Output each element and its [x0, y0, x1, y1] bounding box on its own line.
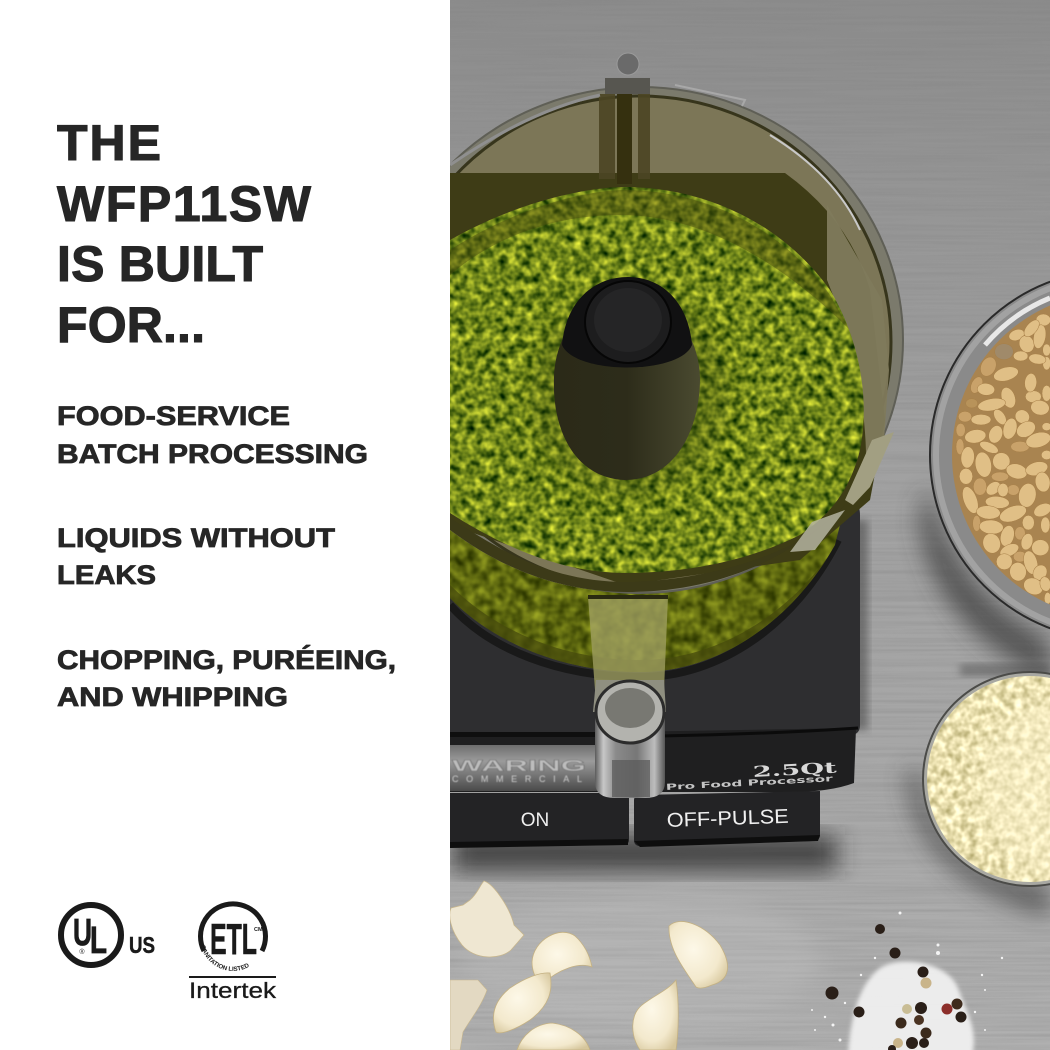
button: OFF-PULSE [634, 791, 820, 847]
use case: liquids without leaks: LIQUIDS WITHOUT [57, 523, 336, 553]
model label [666, 759, 837, 793]
button: ON [450, 793, 629, 848]
panel: white text column [0, 0, 450, 1050]
metal brand plate: COMMERCIAL [452, 774, 582, 784]
button: ON: ON [521, 810, 549, 831]
icon: ETL sanitation listed mark with Intertek: SANITATION LISTED [204, 945, 249, 971]
button: OFF-PULSE: OFF-PULSE [666, 806, 789, 832]
model label: 2.5Qt [752, 759, 837, 781]
shadows on counter [452, 490, 1050, 915]
bowl of grated parmesan [923, 672, 1050, 886]
icon: UL US certification mark: L [90, 920, 107, 962]
icon: ETL sanitation listed mark with Intertek [189, 901, 277, 1003]
icon: UL US certification mark: U [73, 912, 92, 954]
icon: ETL sanitation listed mark with Intertek: Intertek [189, 978, 277, 1003]
center stem and knob [554, 277, 700, 480]
title: WFP11SW [57, 176, 312, 232]
title: THE [57, 115, 161, 171]
model label: Pro Food Processor [666, 774, 834, 793]
use case: chopping, puréeing, whipping: AND WHIPPING [57, 682, 288, 712]
pine nuts [956, 314, 1050, 604]
garlic skin, lower left [450, 980, 487, 1050]
photo: food processor with pesto on steel counter [450, 0, 1050, 1050]
use case: food-service batch processing: FOOD-SERVICE [57, 401, 290, 431]
steel countertop [450, 0, 1050, 1050]
icon: UL US certification mark: ® [79, 948, 85, 956]
use case: food-service batch processing: BATCH PROCESSING [57, 439, 368, 469]
bowl of pine nuts [930, 270, 1050, 640]
title: FOR... [57, 297, 205, 353]
lid edge highlights [450, 85, 894, 552]
icon: UL US certification mark: US [129, 932, 155, 958]
metal brand plate: WARING [452, 758, 586, 775]
garlic skin, upper left [450, 881, 524, 957]
icon: ETL sanitation listed mark with Intertek: ETL [210, 915, 257, 964]
use case: liquids without leaks: LEAKS [57, 560, 156, 590]
bowl lower wall with pesto [450, 526, 840, 672]
garlic clove, large [669, 921, 728, 988]
metal brand plate [450, 745, 598, 791]
pesto surface [450, 180, 880, 580]
salt pile with scattered grains [811, 912, 1003, 1050]
garlic clove, tilted [494, 973, 551, 1033]
garlic clove, bottom cut off [517, 1023, 590, 1050]
lid feed tab [599, 53, 650, 184]
title [57, 115, 312, 353]
bowl and lid [377, 87, 903, 593]
garlic clove, bottom [633, 980, 678, 1050]
use case: food-service batch processing [57, 401, 368, 469]
pour handle [588, 597, 668, 798]
peppercorns [826, 924, 966, 1050]
use case: liquids without leaks [57, 523, 336, 590]
icon: ETL sanitation listed mark with Intertek: CM [254, 927, 263, 933]
garlic clove [532, 932, 592, 985]
use case: chopping, puréeing, whipping [57, 644, 396, 712]
use case: chopping, puréeing, whipping: CHOPPING, PURÉEING, [57, 644, 396, 675]
title: IS BUILT [57, 236, 263, 292]
icon: UL US certification mark [61, 905, 155, 965]
processor base [450, 503, 860, 792]
